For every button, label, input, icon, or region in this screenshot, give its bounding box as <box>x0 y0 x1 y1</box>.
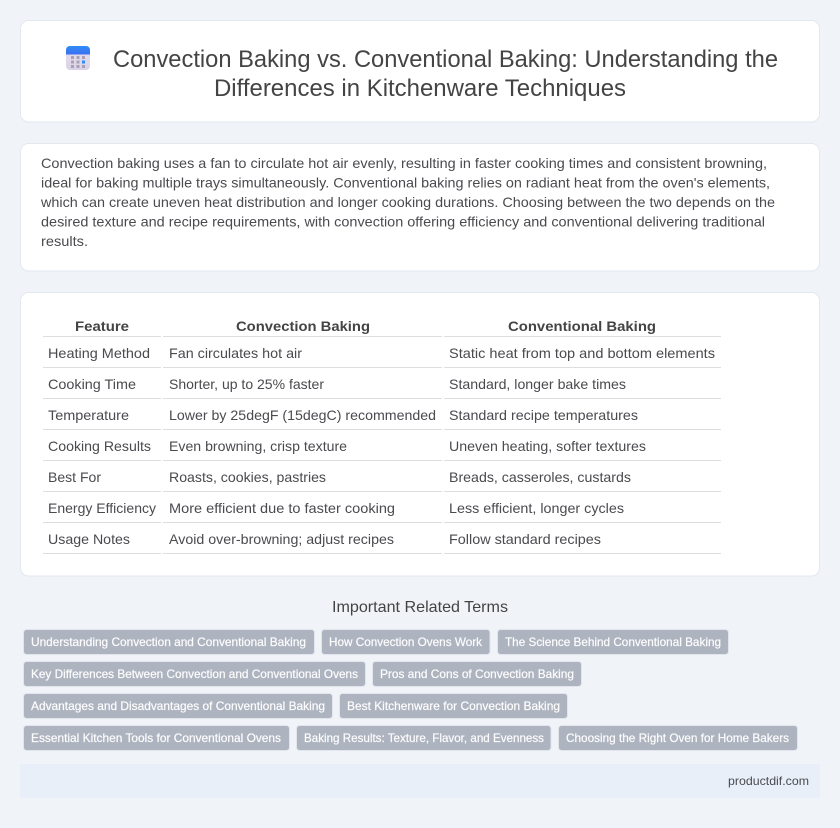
row: cooking results <box>48 438 646 454</box>
row: cooking time: Cooking Time <box>48 376 136 392</box>
row: temperature: Lower by 25degF (15degC) recommended <box>169 407 436 423</box>
footer: productdif.com <box>728 774 809 788</box>
related term chips: The Science Behind Conventional Baking <box>505 635 721 649</box>
row: heating method: Heating Method <box>48 345 150 361</box>
intro paragraph: ideal for baking multiple trays simultaneously. Conventional baking relies on radiant heat from the oven's elements, <box>41 174 770 190</box>
row: heating method <box>48 345 715 361</box>
row: heating method: Static heat from top and bottom elements <box>449 345 715 361</box>
panel: header card <box>20 20 820 122</box>
table header row: Convection Baking <box>236 318 370 334</box>
related term chips: Essential Kitchen Tools for Conventional Ovens <box>31 731 281 745</box>
row: energy efficiency: Energy Efficiency <box>48 500 156 516</box>
intro paragraph: Convection baking uses a fan to circulate hot air evenly, resulting in faster cooking times and consistent browning, <box>41 155 767 171</box>
row: best for: Roasts, cookies, pastries <box>169 469 326 485</box>
row: usage notes: Avoid over-browning; adjust recipes <box>169 531 394 547</box>
row: cooking time <box>48 376 626 392</box>
related term chips: Baking Results: Texture, Flavor, and Evenness <box>304 731 544 745</box>
intro paragraph: results. <box>41 233 88 249</box>
row: cooking results: Even browning, crisp texture <box>169 438 347 454</box>
related term chips: Pros and Cons of Convection Baking <box>380 667 574 681</box>
intro paragraph <box>40 155 775 249</box>
title: Convection Baking vs. Conventional Baking: Understanding the <box>113 46 778 73</box>
title: Differences in Kitchenware Techniques <box>214 75 626 102</box>
table header row <box>75 318 656 334</box>
row: usage notes: Usage Notes <box>48 531 130 547</box>
related term chips <box>24 630 798 750</box>
row: energy efficiency <box>48 500 624 516</box>
row: cooking results: Cooking Results <box>48 438 151 454</box>
icon: calendar <box>66 46 90 70</box>
related term chips: Understanding Convection and Conventional Baking <box>31 635 306 649</box>
related term chips: Choosing the Right Oven for Home Bakers <box>566 731 789 745</box>
related term chips: Advantages and Disadvantages of Conventional Baking <box>31 699 325 713</box>
related term chips: Best Kitchenware for Convection Baking <box>347 699 560 713</box>
row: usage notes <box>48 531 601 547</box>
table header row: Conventional Baking <box>508 318 656 334</box>
row: energy efficiency: Less efficient, longer cycles <box>449 500 624 516</box>
related term chips: How Convection Ovens Work <box>329 635 483 649</box>
footer <box>20 764 820 798</box>
heading: important related terms: Important Related Terms <box>332 599 508 616</box>
related term chips: Key Differences Between Convection and Conventional Ovens <box>31 667 358 681</box>
intro paragraph: which can create uneven heat distribution and longer cooking durations. Choosing between the two depends on the <box>40 194 775 210</box>
row: best for <box>48 469 631 485</box>
row: temperature: Standard recipe temperatures <box>449 407 638 423</box>
row: heating method: Fan circulates hot air <box>169 345 302 361</box>
intro paragraph: desired texture and recipe requirements, with convection offering efficiency and conventional delivering traditional <box>41 214 765 230</box>
row: energy efficiency: More efficient due to faster cooking <box>169 500 395 516</box>
row: cooking results: Uneven heating, softer textures <box>449 438 646 454</box>
row: best for: Breads, casseroles, custards <box>449 469 631 485</box>
table header row: Feature <box>75 318 129 334</box>
row: cooking time: Shorter, up to 25% faster <box>169 376 324 392</box>
row: temperature <box>48 407 638 423</box>
row: usage notes: Follow standard recipes <box>449 531 601 547</box>
panel: comparison table <box>20 292 820 576</box>
title <box>113 46 778 102</box>
row: cooking time: Standard, longer bake times <box>449 376 626 392</box>
row: best for: Best For <box>48 469 101 485</box>
row: temperature: Temperature <box>48 407 129 423</box>
panel: intro text <box>20 144 820 271</box>
